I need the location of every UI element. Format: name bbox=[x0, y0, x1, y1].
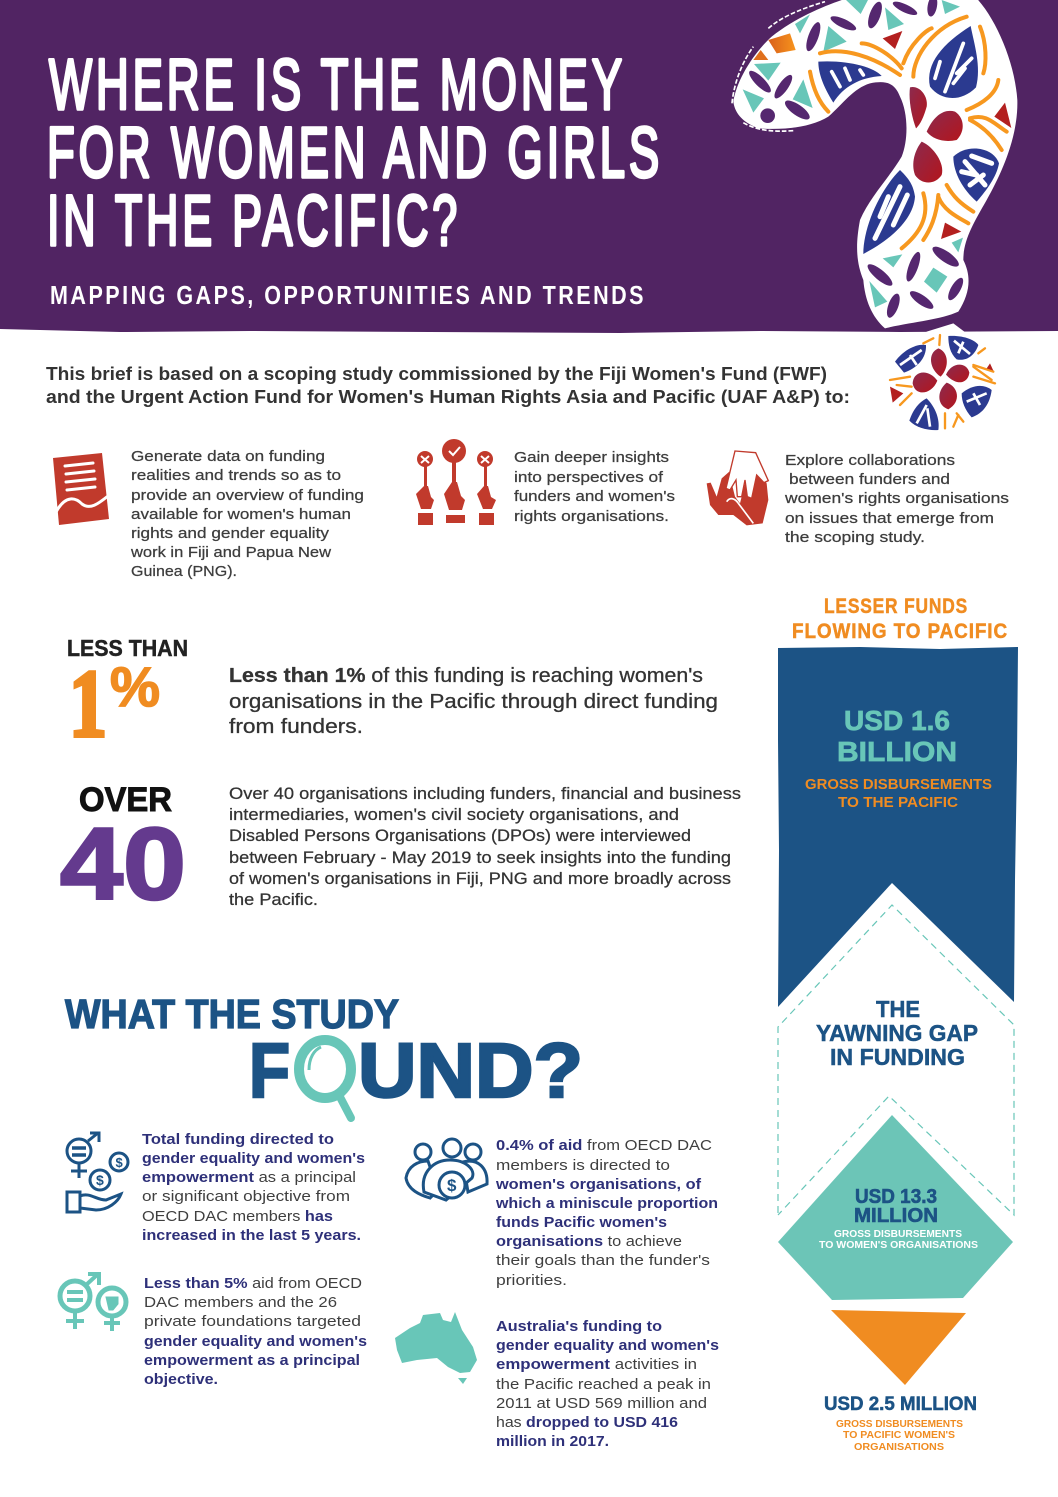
subtitle: MAPPING GAPS, OPPORTUNITIES AND TRENDS bbox=[50, 280, 646, 310]
text: 0.4% of aid: women's organisations, of bbox=[495, 1176, 702, 1193]
icon: group with dollar coin: $ bbox=[447, 1176, 457, 1195]
stat: over 40: 40 bbox=[60, 807, 186, 921]
panel heading: lesser funds bbox=[792, 595, 1008, 643]
panel: yawning gap dashed outline bbox=[778, 905, 1014, 1215]
text: over 40 explanation: of women's organisations in Fiji, PNG and more broadly across bbox=[229, 869, 731, 888]
panel heading: lesser funds: LESSER FUNDS bbox=[824, 595, 968, 618]
panel heading: lesser funds: FLOWING TO PACIFIC bbox=[792, 620, 1008, 643]
icon: document with wave bbox=[53, 453, 109, 525]
text: 0.4% of aid: organisations to achieve bbox=[496, 1233, 682, 1250]
icon: magnifying glass letter O bbox=[299, 1040, 351, 1118]
text: less than 5%: Less than 5% aid from OECD bbox=[144, 1275, 362, 1292]
title: IN THE PACIFIC? bbox=[47, 182, 461, 261]
text: less than 5%: private foundations targeted bbox=[144, 1313, 361, 1330]
panel: yawning gap dashed outline: IN FUNDING bbox=[830, 1044, 965, 1070]
icon: map of Australia bbox=[395, 1312, 477, 1384]
stat: less than 1%: LESS THAN bbox=[67, 635, 188, 661]
text: australia's funding: Australia's funding to bbox=[496, 1318, 662, 1335]
text: total funding: Total funding directed to bbox=[142, 1131, 334, 1148]
icon: group with dollar coin bbox=[406, 1139, 487, 1200]
panel: USD 13.3 million diamond: TO WOMEN'S ORGANISATIONS bbox=[819, 1239, 978, 1251]
text: explore collaborations bbox=[784, 452, 1009, 546]
panel: USD 13.3 million diamond bbox=[778, 1115, 1013, 1300]
text: gain insights: Gain deeper insights bbox=[514, 449, 669, 466]
panel: USD 13.3 million diamond: USD 13.3 bbox=[855, 1186, 937, 1208]
text: generate data: available for women's human bbox=[131, 506, 351, 523]
panel: USD 2.5 million triangle: GROSS DISBURSEMENTS bbox=[836, 1418, 963, 1430]
panel: USD 2.5 million triangle: TO PACIFIC WOMEN'S bbox=[843, 1429, 955, 1441]
text: australia's funding bbox=[496, 1318, 719, 1450]
text: total funding: gender equality and women's bbox=[142, 1150, 365, 1167]
text: generate data bbox=[130, 448, 364, 580]
text: less than 5%: empowerment as a principal bbox=[144, 1352, 360, 1369]
text: australia's funding: empowerment activities in bbox=[496, 1356, 697, 1373]
text: over 40 explanation: between February - May 2019 to seek insights into the funding bbox=[229, 848, 731, 867]
icon: patterned question mark bbox=[732, 0, 1017, 328]
text: less than 5%: objective. bbox=[144, 1371, 218, 1388]
text: generate data: provide an overview of funding bbox=[131, 487, 364, 504]
text: less than 5%: DAC members and the 26 bbox=[144, 1294, 337, 1311]
text: total funding: increased in the last 5 years. bbox=[142, 1227, 361, 1244]
text: 0.4% of aid: which a miniscule proportion bbox=[495, 1195, 718, 1212]
panel: USD 2.5 million triangle: USD 2.5 MILLION bbox=[824, 1394, 977, 1415]
text: australia's funding: the Pacific reached a peak in bbox=[496, 1376, 711, 1393]
panel: USD 1.6 billion chevron: USD 1.6 bbox=[844, 705, 950, 736]
text: less than 5% bbox=[144, 1275, 367, 1388]
panel: USD 1.6 billion chevron: GROSS DISBURSEMENTS bbox=[805, 777, 992, 793]
text: explore collaborations: between funders and bbox=[789, 471, 950, 488]
text: generate data: work in Fiji and Papua New bbox=[130, 544, 331, 561]
title: FOR WOMEN AND GIRLS bbox=[47, 114, 663, 193]
panel: yawning gap dashed outline: YAWNING GAP bbox=[816, 1020, 978, 1046]
panel: USD 2.5 million triangle bbox=[824, 1310, 977, 1453]
icon: gender equality money: $ bbox=[116, 1155, 124, 1170]
panel: USD 1.6 billion chevron: TO THE PACIFIC bbox=[838, 795, 959, 811]
text: less than 1% explanation: Less than 1% of this funding is reaching women's bbox=[229, 665, 703, 687]
text: australia's funding: gender equality and women's bbox=[496, 1337, 719, 1354]
text: less than 5%: gender equality and women's bbox=[144, 1333, 367, 1350]
icon: gender equality money bbox=[67, 1133, 128, 1212]
text: explore collaborations: the scoping study. bbox=[785, 529, 925, 546]
text: gain insights: funders and women's bbox=[514, 488, 675, 505]
text: less than 1% explanation bbox=[229, 665, 718, 738]
text: total funding: OECD DAC members has bbox=[142, 1208, 333, 1225]
text: 0.4% of aid: their goals than the funder's bbox=[496, 1252, 710, 1269]
heading: what the study found bbox=[65, 991, 583, 1118]
text: 0.4% of aid: priorities. bbox=[496, 1272, 567, 1289]
text: less than 1% explanation: from funders. bbox=[229, 716, 363, 738]
intro text: This brief is based on a scoping study commissioned by the Fiji Women's Fund (FWF) bbox=[46, 364, 827, 384]
heading: what the study found: F bbox=[249, 1028, 290, 1114]
text: over 40 explanation: Disabled Persons Organisations (DPOs) were interviewed bbox=[229, 826, 691, 845]
panel: USD 1.6 billion chevron: BILLION bbox=[837, 736, 957, 767]
text: explore collaborations: Explore collaborations bbox=[785, 452, 955, 469]
intro text: and the Urgent Action Fund for Women's Human Rights Asia and Pacific (UAF A&P) to: bbox=[46, 387, 850, 407]
heading: what the study found: WHAT THE STUDY bbox=[65, 991, 399, 1037]
text: over 40 explanation: Over 40 organisations including funders, financial and business bbox=[229, 784, 741, 803]
panel: yawning gap dashed outline: THE bbox=[876, 996, 920, 1022]
text: total funding bbox=[142, 1131, 365, 1244]
text: gain insights: into perspectives of bbox=[514, 469, 664, 486]
text: over 40 explanation bbox=[229, 784, 741, 909]
panel: USD 13.3 million diamond: GROSS DISBURSEMENTS bbox=[834, 1228, 962, 1240]
text: generate data: Guinea (PNG). bbox=[131, 563, 237, 580]
text: 0.4% of aid bbox=[495, 1137, 718, 1289]
text: over 40 explanation: the Pacific. bbox=[229, 890, 318, 909]
text: total funding: or significant objective from bbox=[142, 1188, 350, 1205]
text: total funding: empowerment as a principal bbox=[142, 1169, 356, 1186]
intro text bbox=[46, 364, 850, 407]
icon: patterned dot of question mark bbox=[890, 323, 995, 430]
stat: less than 1%: 1 bbox=[69, 650, 107, 757]
text: explore collaborations: women's rights organisations bbox=[784, 490, 1009, 507]
text: generate data: realities and trends so as to bbox=[131, 467, 341, 484]
stat: less than 1% bbox=[67, 635, 188, 757]
panel: USD 2.5 million triangle: ORGANISATIONS bbox=[854, 1441, 944, 1453]
text: 0.4% of aid: 0.4% of aid from OECD DAC bbox=[496, 1137, 712, 1154]
panel: USD 13.3 million diamond: MILLION bbox=[854, 1205, 938, 1227]
text: 0.4% of aid: funds Pacific women's bbox=[496, 1214, 667, 1231]
icon: gender equality money: $ bbox=[96, 1172, 104, 1188]
icon: joined hands bbox=[707, 451, 768, 525]
stat: less than 1%: % bbox=[110, 655, 160, 718]
icon: voting hands bbox=[416, 439, 496, 525]
text: australia's funding: has dropped to USD 416 bbox=[496, 1414, 678, 1431]
icon: gender symbols with fist bbox=[60, 1274, 126, 1331]
text: 0.4% of aid: members is directed to bbox=[496, 1157, 670, 1174]
text: australia's funding: million in 2017. bbox=[496, 1433, 609, 1450]
title: WHERE IS THE MONEY bbox=[49, 46, 626, 125]
text: generate data: rights and gender equality bbox=[131, 525, 330, 542]
title bbox=[47, 46, 663, 261]
text: explore collaborations: on issues that emerge from bbox=[785, 510, 994, 527]
text: australia's funding: 2011 at USD 569 million and bbox=[496, 1395, 707, 1412]
panel: USD 1.6 billion chevron bbox=[778, 647, 1018, 1007]
text: gain insights bbox=[514, 449, 675, 525]
text: over 40 explanation: intermediaries, women's civil society organisations, and bbox=[229, 805, 679, 824]
heading: what the study found: UND? bbox=[358, 1028, 583, 1114]
text: gain insights: rights organisations. bbox=[514, 508, 669, 525]
stat: over 40: OVER bbox=[79, 781, 172, 819]
text: less than 1% explanation: organisations in the Pacific through direct funding bbox=[229, 691, 718, 713]
text: generate data: Generate data on funding bbox=[131, 448, 325, 465]
header banner bbox=[0, 0, 1058, 333]
